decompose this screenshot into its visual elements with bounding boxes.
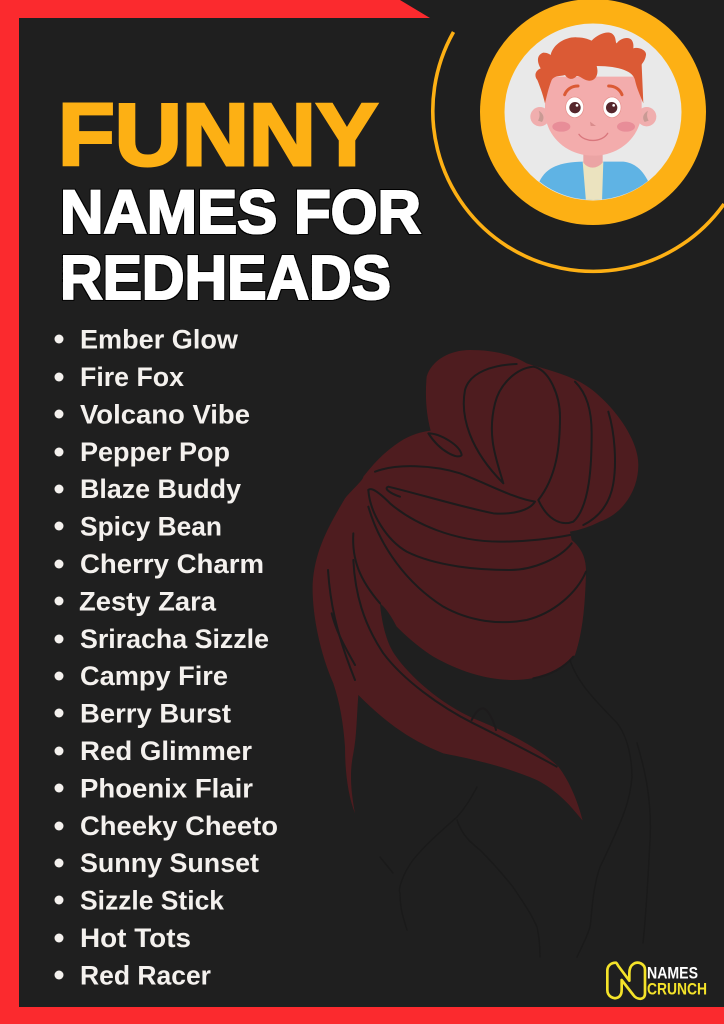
title line: NAMES FOR: NAMES FOR xyxy=(60,178,421,246)
hair strand lines xyxy=(328,364,615,767)
names list: Volcano Vibe xyxy=(80,399,250,429)
names list: Cherry Charm xyxy=(80,549,264,579)
title word: FUNNY: FUNNY xyxy=(58,85,378,184)
illustration: woman with red hair bun xyxy=(313,350,638,821)
names list: Spicy Bean xyxy=(80,512,222,542)
names list: Campy Fire xyxy=(80,661,228,691)
names list: Fire Fox xyxy=(80,362,184,392)
names list: Sunny Sunset xyxy=(80,848,259,878)
faint body outline xyxy=(380,660,650,957)
logo wordmark: CRUNCH xyxy=(647,980,707,998)
names list xyxy=(54,324,278,991)
names list: Sizzle Stick xyxy=(80,886,225,916)
names list: Cheeky Cheeto xyxy=(80,811,278,841)
title xyxy=(58,85,421,313)
names list: Zesty Zara xyxy=(79,586,217,616)
names list: Berry Burst xyxy=(80,699,231,729)
logo wordmark: NAMES xyxy=(647,964,698,982)
names list: Blaze Buddy xyxy=(80,474,241,504)
title line: REDHEADS: REDHEADS xyxy=(60,244,391,313)
names list: Phoenix Flair xyxy=(80,773,253,803)
logo mark xyxy=(607,963,645,999)
hair silhouette xyxy=(313,350,638,821)
names list: Red Racer xyxy=(80,961,211,991)
names list: Pepper Pop xyxy=(80,437,230,467)
logo: Names Crunch xyxy=(607,963,707,999)
avatar badge with boy portrait xyxy=(480,0,706,225)
hair xyxy=(535,33,646,103)
logo wordmark xyxy=(647,964,707,998)
decorative arc around avatar xyxy=(433,32,724,271)
names list: Red Glimmer xyxy=(80,736,252,766)
names list: Hot Tots xyxy=(80,923,191,953)
names list: Sriracha Sizzle xyxy=(80,624,269,654)
names list: Ember Glow xyxy=(80,324,239,354)
